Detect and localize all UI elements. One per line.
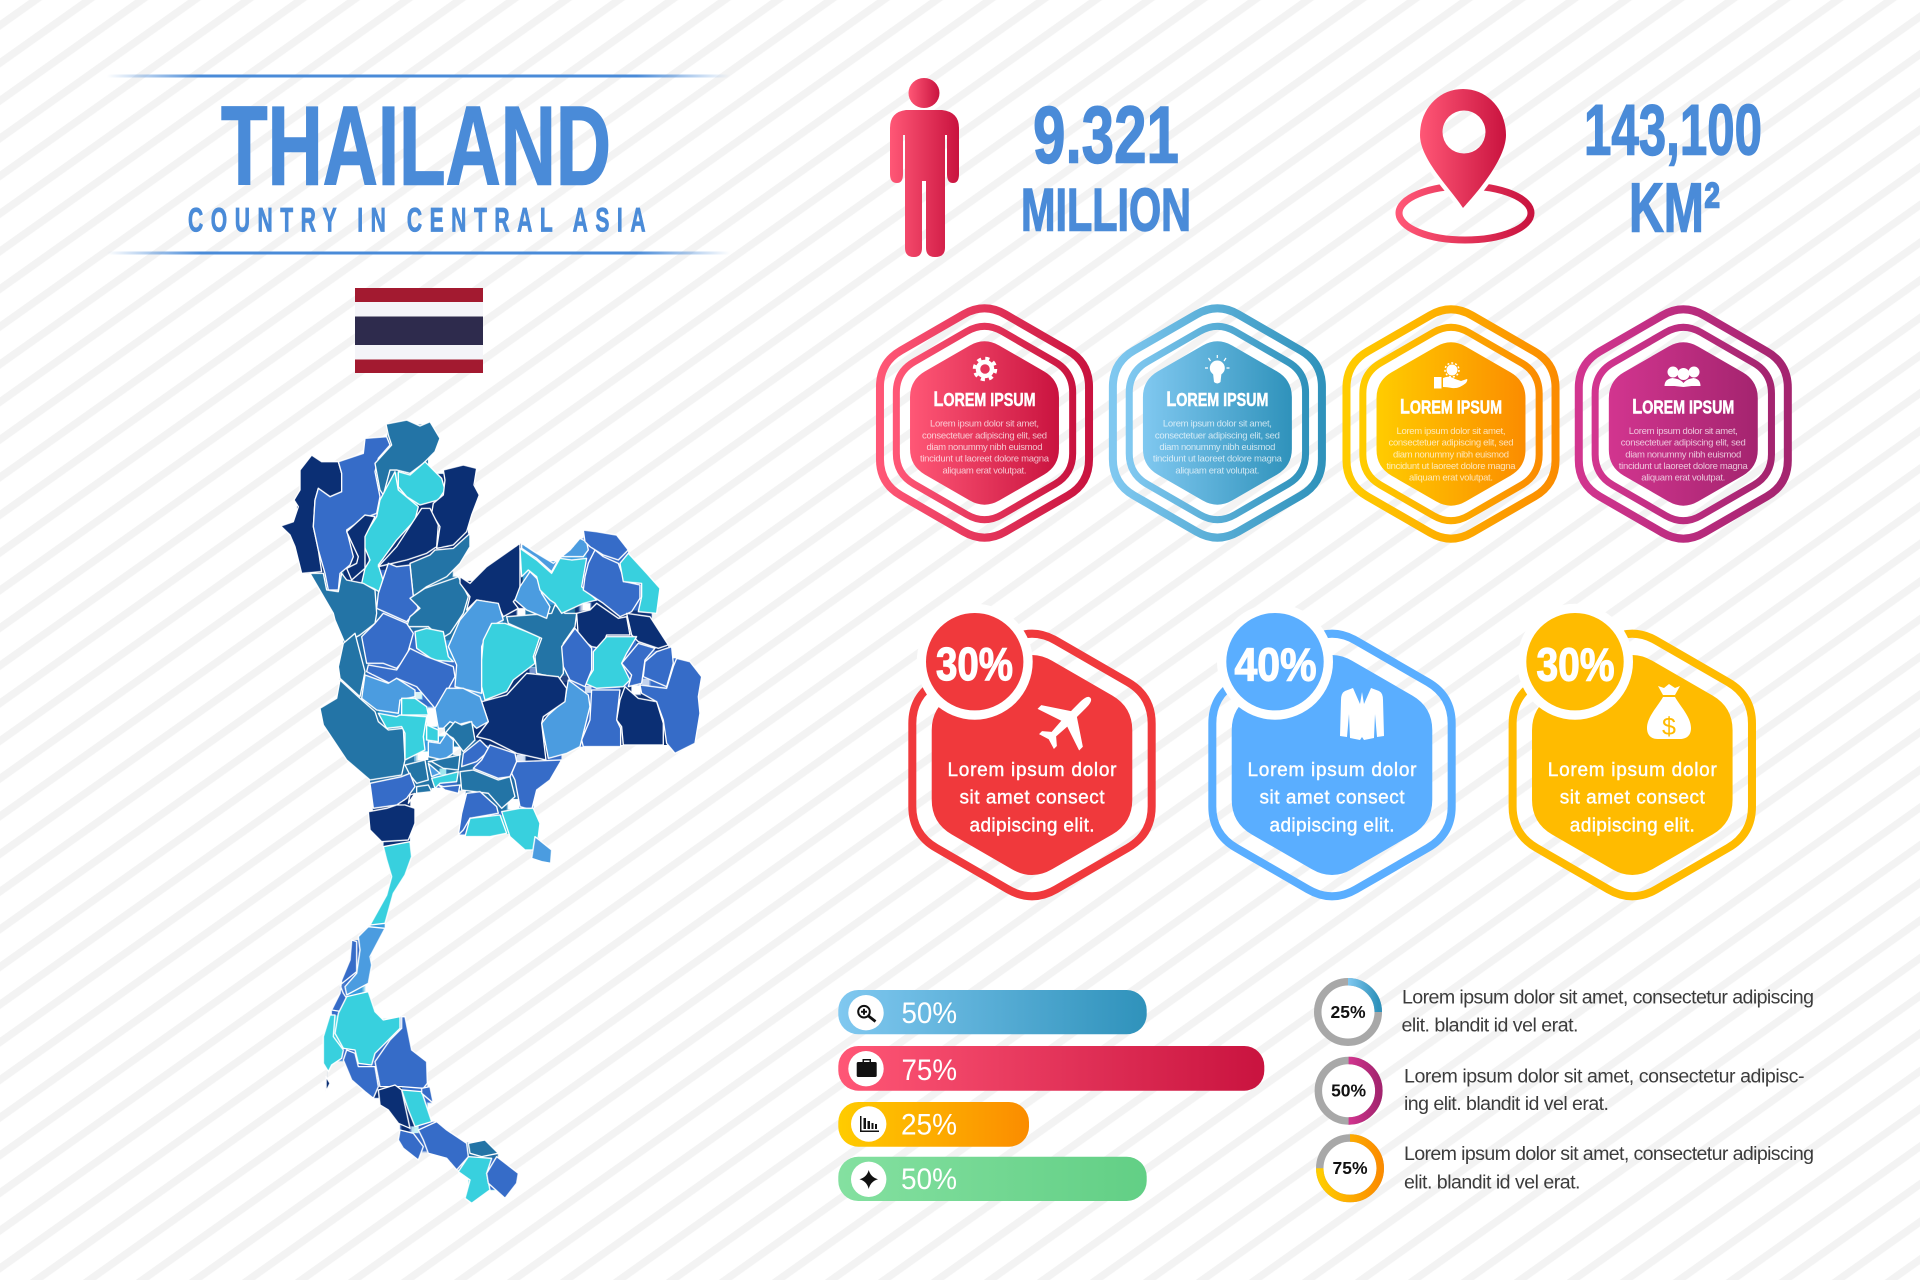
area figure: 143,100	[1584, 92, 1762, 170]
text: third note: elit. blandit id vel erat.	[1404, 1171, 1580, 1193]
text: second note	[1404, 1065, 1804, 1115]
icon: hand holding gear	[1434, 363, 1467, 388]
map: southern peninsula provinces	[323, 837, 552, 1203]
hexagon card: yellow	[1346, 309, 1556, 539]
card body: tincidunt ut laoreet dolore magna	[920, 454, 1050, 465]
map of Thailand	[281, 420, 702, 1203]
card body: Lorem ipsum dolor sit amet,	[1629, 426, 1738, 437]
card body: aliquam erat volutpat.	[1641, 473, 1725, 484]
card text: Lorem ipsum dolor	[1548, 760, 1717, 781]
card text: sit amet consect	[1260, 788, 1405, 808]
percent card: blue 40%	[1212, 604, 1452, 896]
card body: diam nonummy nibh euismod	[1159, 442, 1275, 453]
percent value: 30%	[1536, 638, 1614, 690]
card body: aliquam erat volutpat.	[1409, 473, 1493, 484]
value: 50%	[902, 997, 957, 1030]
icon: group of people	[1664, 366, 1700, 387]
card body: diam nonummy nibh euismod	[926, 442, 1042, 453]
card body: Lorem ipsum dolor sit amet,	[1163, 419, 1272, 430]
value: 25%	[901, 1108, 957, 1141]
icon: location pin	[1399, 89, 1531, 240]
card body: diam nonummy nibh euismod	[1625, 449, 1741, 460]
icon: four point star	[860, 1170, 878, 1189]
progress bar: 75% red	[838, 1046, 1264, 1091]
flag of Thailand	[355, 288, 483, 373]
card text: adipiscing elit.	[1270, 816, 1394, 836]
card text	[1548, 760, 1717, 836]
percent value: 40%	[1234, 638, 1316, 690]
card text: adipiscing elit.	[970, 816, 1094, 836]
card body: aliquam erat volutpat.	[942, 465, 1026, 476]
card body: consectetuer adipiscing elit, sed	[1155, 430, 1280, 441]
icon: money bag: $	[1662, 713, 1676, 741]
card heading: LOREM IPSUM	[1166, 388, 1268, 411]
donut stat: 25%	[1318, 982, 1378, 1042]
card text: sit amet consect	[960, 788, 1105, 808]
donut value: 50%	[1331, 1081, 1367, 1101]
card text: adipiscing elit.	[1570, 816, 1695, 836]
percent card: red 30%	[912, 604, 1152, 896]
card body: tincidunt ut laoreet dolore magna	[1619, 461, 1749, 472]
value: 75%	[902, 1054, 957, 1087]
card body	[920, 419, 1050, 476]
population unit: MILLION	[1021, 176, 1191, 244]
icon: gear	[974, 358, 996, 380]
card heading: LOREM IPSUM	[1400, 396, 1502, 418]
card body: tincidunt ut laoreet dolore magna	[1153, 454, 1283, 465]
card body: Lorem ipsum dolor sit amet,	[1396, 426, 1506, 437]
card body: tincidunt ut laoreet dolore magna	[1386, 461, 1516, 472]
percent value: 30%	[936, 638, 1013, 690]
text: first note: Lorem ipsum dolor sit amet, consectetur adipiscing	[1402, 986, 1814, 1008]
title: THAILAND	[221, 84, 611, 208]
value: 50%	[901, 1163, 957, 1196]
subtitle: COUNTRY IN CENTRAL ASIA	[188, 200, 646, 239]
card body: consectetuer adipiscing elit, sed	[1388, 438, 1514, 449]
text: third note	[1404, 1143, 1814, 1193]
hexagon card: red	[880, 308, 1089, 538]
donut value: 75%	[1332, 1158, 1368, 1178]
hexagon card: purple	[1579, 309, 1788, 539]
text: second note: Lorem ipsum dolor sit amet, consectetur adipisc-	[1404, 1065, 1804, 1087]
text: first note	[1402, 986, 1814, 1037]
card body: consectetuer adipiscing elit, sed	[1621, 438, 1746, 449]
icon: airplane	[1026, 677, 1111, 762]
title block	[107, 74, 730, 254]
card body: aliquam erat volutpat.	[1175, 465, 1259, 476]
area unit: KM²	[1629, 168, 1720, 246]
card body	[1619, 426, 1749, 484]
card body	[1386, 426, 1516, 484]
progress bar: 50% green	[838, 1157, 1147, 1201]
text: second note: ing elit. blandit id vel erat.	[1404, 1093, 1609, 1115]
icon: light bulb	[1205, 355, 1230, 384]
text: third note: Lorem ipsum dolor sit amet, consectetur adipiscing	[1404, 1143, 1814, 1165]
stat: area	[1399, 89, 1762, 246]
card text	[1248, 760, 1417, 836]
icon: bar chart	[860, 1116, 879, 1132]
hexagon card: blue	[1113, 308, 1322, 538]
card body: Lorem ipsum dolor sit amet,	[930, 419, 1039, 430]
text: first note: elit. blandit id vel erat.	[1402, 1015, 1578, 1037]
progress bar: 25% orange	[838, 1102, 1029, 1147]
map: north, central and northeast provinces	[281, 420, 702, 850]
icon: person	[890, 78, 959, 257]
card body: consectetuer adipiscing elit, sed	[922, 430, 1047, 441]
card text: Lorem ipsum dolor	[1248, 760, 1417, 781]
icon: suit jacket	[1340, 688, 1384, 740]
icon: briefcase	[857, 1059, 877, 1077]
stat: population	[890, 78, 1191, 257]
icon: money bag	[1647, 684, 1691, 741]
card body	[1153, 419, 1283, 476]
card heading: LOREM IPSUM	[934, 388, 1036, 411]
card text	[948, 760, 1117, 836]
card heading: LOREM IPSUM	[1632, 396, 1734, 418]
card text: Lorem ipsum dolor	[948, 760, 1117, 781]
icon: magnifier	[858, 1006, 876, 1022]
card text: sit amet consect	[1560, 788, 1706, 808]
card body: diam nonummy nibh euismod	[1393, 449, 1509, 460]
donut stat: 75%	[1320, 1138, 1380, 1199]
donut value: 25%	[1330, 1002, 1366, 1022]
population figure: 9.321	[1033, 90, 1179, 180]
progress bar: 50% blue	[838, 990, 1147, 1034]
donut stat: 50%	[1318, 1060, 1379, 1121]
percent card: yellow 30%	[1513, 604, 1752, 896]
